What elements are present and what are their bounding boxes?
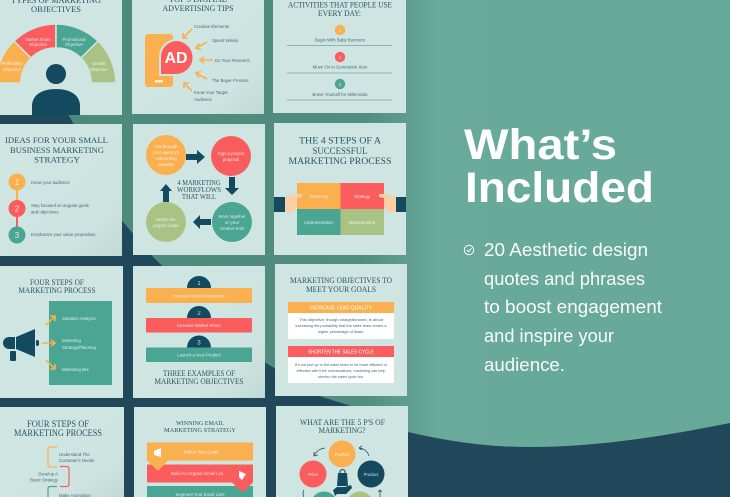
tips list: Do Your Research [215, 58, 250, 63]
heading: MARKETING STRATEGY [164, 427, 236, 434]
tips list [194, 24, 250, 102]
heading [288, 136, 392, 166]
title: Included [465, 164, 654, 212]
body text: to boost engagement [484, 296, 662, 317]
panel: digital advertising tips [132, 0, 264, 114]
arrows [183, 29, 213, 91]
email steps: Segment Your Email Lists [176, 492, 224, 497]
heading: THREE EXAMPLES OF [163, 369, 235, 378]
segment labels: Promotional [63, 37, 86, 42]
steps box [49, 301, 112, 385]
workflow circles: Get through [155, 144, 178, 149]
icon: person [32, 64, 80, 115]
heading: IDEAS FOR YOUR SMALL [5, 136, 108, 145]
objective card: lead quality: This objective, though straightforward, is about [299, 317, 384, 322]
workflow circles: Sign a project [218, 151, 245, 156]
heading: MARKETING OBJECTIVES TO [290, 276, 392, 285]
P circles: Product [335, 452, 350, 457]
heading: MARKETING PROCESS [18, 286, 96, 295]
heading [5, 136, 108, 164]
numbered list: Stay focused on angular goals [31, 203, 89, 208]
objective card: sales cycle: SHORTEN THE SALES CYCLE [308, 350, 375, 356]
flow labels: Develop A [38, 472, 58, 476]
panel: marketing objectives to meet your goals [275, 264, 407, 396]
panel: types of marketing objectives [0, 0, 122, 115]
objective card: lead quality: increasing the probability that the sales team closes a [296, 323, 387, 328]
four step grid: Discovery [310, 194, 329, 199]
heading: ADVERTISING TIPS [162, 4, 234, 13]
segment labels: Objective [65, 42, 84, 47]
heading: WORKFLOWS [177, 186, 221, 194]
body text [484, 239, 662, 375]
heading: FOUR STEPS OF [27, 419, 89, 429]
heading [164, 420, 236, 434]
body text: quotes and phrases [484, 268, 645, 289]
numbered steps: Brave Yourself for Millennials [312, 92, 368, 97]
numbered list: 1 [15, 178, 20, 187]
icon: hand holding bag [333, 470, 352, 496]
numbered steps [287, 25, 392, 100]
heading: MARKETING PROCESS [288, 156, 392, 166]
flow labels: Understand The [59, 452, 90, 457]
steps box: Situation Analysis [62, 316, 96, 321]
numbered steps: Move On to Generation Xers [313, 64, 367, 70]
curved arrows [303, 446, 382, 497]
panel: three examples of marketing objectives [133, 266, 265, 398]
panel: 5 P's of marketing [276, 406, 408, 497]
steps box: Marketing Mix [62, 367, 90, 372]
steps box: Marketing [62, 338, 81, 343]
body text: audience. [484, 354, 565, 375]
panel: daily activities [273, 0, 406, 113]
numbered list: and objectives [31, 210, 58, 214]
email steps [147, 442, 253, 497]
segment labels: Profitability [1, 61, 23, 66]
workflow circles: onboarding [155, 156, 177, 161]
heading: STRATEGY [34, 156, 80, 164]
objective card: sales cycle: It's not just up to the sales team to be more efficient or [295, 362, 388, 367]
objective card: sales cycle: shorten the sales cycle too. [318, 374, 364, 379]
tips list: Know Your Target [194, 90, 228, 95]
numbered list: 2 [15, 204, 20, 214]
objective card: lead quality: INCREASE LEAD QUALITY [310, 306, 373, 312]
numbered steps: 1 [339, 28, 342, 33]
heading: 4 MARKETING [178, 179, 220, 187]
icon: check badge [464, 245, 474, 255]
numbered list: Emphasize your value proposition [31, 232, 96, 237]
workflow circles: process [158, 162, 174, 167]
numbered steps: 3 [339, 82, 342, 87]
tips list: Spend Wisely [212, 38, 239, 43]
tips list: Creative Elements [194, 24, 229, 29]
four step grid: Implementation [304, 220, 334, 225]
numbered list: 3 [15, 231, 20, 240]
four step grid: Measurement [349, 220, 376, 225]
numbered bars: 3 [197, 340, 201, 346]
segment labels: Objective [3, 67, 22, 72]
heading [290, 276, 392, 294]
workflow circles: project scope [153, 223, 179, 228]
workflow circles: proposal [223, 157, 239, 162]
icon: phone with AD bubble: AD [164, 50, 188, 67]
workflow arrows [160, 150, 239, 229]
workflow circles: Work together [219, 214, 246, 219]
heading [14, 419, 102, 438]
heading: WHAT ARE THE 5 P'S OF [300, 418, 385, 427]
title [464, 121, 654, 212]
P circles: Price [308, 472, 319, 477]
numbered bars: Increase Market Share [177, 323, 221, 328]
heading [288, 0, 392, 18]
semicircle chart [0, 24, 116, 83]
heading: THE 4 STEPS OF A [299, 136, 382, 146]
numbered bars [146, 276, 252, 362]
heading: WINNING EMAIL [176, 420, 224, 427]
segment labels: Growth [92, 61, 107, 66]
numbered bars: 2 [197, 311, 201, 317]
flow brackets [48, 447, 69, 497]
flow labels [30, 452, 94, 497]
segment labels: Market Share [25, 37, 52, 42]
panel: four steps flow [0, 407, 124, 497]
heading [162, 0, 234, 13]
heading: MARKETING OBJECTIVES [154, 377, 244, 386]
P circles [300, 440, 384, 497]
arrows [42, 316, 55, 369]
workflow circles [146, 135, 252, 242]
numbered steps: 2 [339, 55, 342, 60]
heading [177, 179, 221, 201]
steps box: Strategy/Planning [62, 345, 97, 350]
panel: small business ideas [0, 124, 122, 256]
title: What’s [464, 121, 617, 169]
flow labels: Basic Strategy [30, 478, 59, 482]
heading [300, 418, 385, 435]
email steps: Define Your Goals [184, 450, 218, 454]
objective card: sales cycle [288, 346, 394, 383]
heading: EVERY DAY: [318, 9, 361, 18]
panel: 4 steps of a successful marketing process [274, 123, 406, 255]
panel: four steps with megaphone [0, 266, 123, 398]
numbered bars: Launch a New Product [177, 352, 222, 358]
numbered list: Know your audience [31, 180, 71, 185]
flow labels: Customer's Needs [59, 458, 94, 463]
P circles: Product [364, 472, 379, 477]
email steps: Build An Organic Email List [171, 471, 224, 476]
heading: MARKETING? [318, 426, 366, 435]
heading: MEET YOUR GOALS [306, 285, 376, 294]
heading: OBJECTIVES [31, 5, 81, 14]
objective card: lead quality: higher percentage of deals. [318, 329, 364, 334]
four step grid [297, 183, 384, 235]
heading [11, 0, 101, 14]
four step grid: Strategy [354, 194, 371, 199]
panel: marketing workflows [133, 124, 265, 255]
objective card: lead quality [288, 302, 394, 339]
numbered list [8, 174, 96, 244]
navy diagonal and wave background [0, 114, 730, 497]
numbered bars: Increase Brand Awareness [173, 294, 225, 298]
heading: SUCCESSFUL [312, 146, 368, 156]
heading: THAT WILL [182, 193, 216, 201]
workflow circles: your agency's [153, 150, 179, 155]
workflow circles: creative brief [220, 226, 245, 231]
heading [154, 369, 244, 386]
numbered bars: 1 [197, 281, 201, 287]
numbered steps: Begin With Baby Boomers [315, 38, 365, 42]
tips list: The Buyer Process [212, 78, 249, 83]
hands holding grid [274, 194, 406, 212]
body text: 20 Aesthetic design [484, 239, 648, 260]
tips list: Audience [194, 97, 213, 102]
body text: and inspire your [484, 325, 614, 346]
icon: megaphone [3, 329, 39, 361]
heading [18, 278, 96, 295]
objective card: sales cycle: effective with their conversations, marketing can help [296, 368, 386, 373]
segment labels [1, 37, 109, 72]
panel: winning email marketing strategy [134, 407, 266, 497]
heading: FOUR STEPS OF [30, 278, 84, 287]
heading: BUSINESS MARKETING [10, 146, 104, 155]
workflow circles: on your [225, 220, 240, 225]
heading: ACTIVITIES THAT PEOPLE USE [288, 0, 392, 10]
workflow circles: Define the [156, 217, 176, 222]
segment labels: Objective [29, 42, 48, 47]
segment labels: Objective [90, 67, 109, 72]
heading: MARKETING PROCESS [14, 428, 102, 438]
